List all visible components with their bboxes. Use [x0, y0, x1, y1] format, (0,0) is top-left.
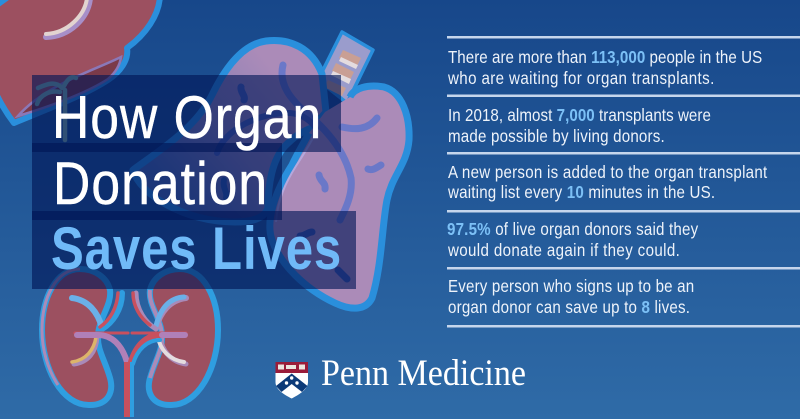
kidney vessels — [72, 293, 186, 364]
icon: trachea — [318, 32, 373, 103]
fact: every 10 minutes — [447, 162, 768, 202]
fact: save 8 lives: Every person who signs up to be an — [448, 276, 694, 296]
fact: living donors: made possible by living donors. — [448, 126, 665, 146]
icon: Penn shield — [276, 362, 308, 398]
title: Donation — [53, 149, 267, 217]
fact: donate again: would donate again if they could. — [447, 240, 680, 260]
fact: living donors — [448, 105, 711, 146]
right kidney — [149, 269, 218, 405]
fact: donate again: 97.5% of live organ donors said they — [447, 219, 699, 239]
icon: liver — [0, 0, 160, 140]
title panel: line 3 — [32, 211, 356, 289]
fact: waiting list — [447, 47, 762, 88]
fact: living donors: In 2018, almost 7,000 transplants were — [448, 105, 711, 125]
icon: lungs — [133, 32, 409, 308]
fact: save 8 lives — [448, 276, 694, 317]
fact: every 10 minutes: A new person is added to the organ transplant — [448, 162, 768, 182]
left lobe — [133, 40, 326, 222]
title: How Organ — [52, 83, 321, 151]
facts list — [447, 36, 800, 328]
logo: Penn Medicine — [276, 353, 526, 398]
fact: save 8 lives: organ donor can save up to 8 lives. — [448, 297, 690, 317]
fact: waiting list: who are waiting for organ transplants. — [447, 68, 714, 88]
ureter stem — [124, 362, 130, 417]
fact: waiting list: There are more than 113,000 people in the US — [448, 47, 762, 67]
title: Saves Lives — [51, 214, 341, 282]
hepatic vessel — [37, 77, 76, 140]
fact: every 10 minutes: waiting list every 10 minutes in the US. — [447, 182, 715, 202]
left kidney — [42, 269, 111, 405]
title — [51, 83, 341, 282]
icon: kidneys — [42, 269, 218, 417]
wordmark: Penn Medicine — [321, 353, 526, 394]
bronchi — [217, 65, 381, 279]
fact: donate again — [447, 219, 699, 260]
right lobe — [270, 86, 409, 308]
title panel: line 2 — [32, 143, 282, 220]
title panel: line 1 — [32, 75, 341, 152]
